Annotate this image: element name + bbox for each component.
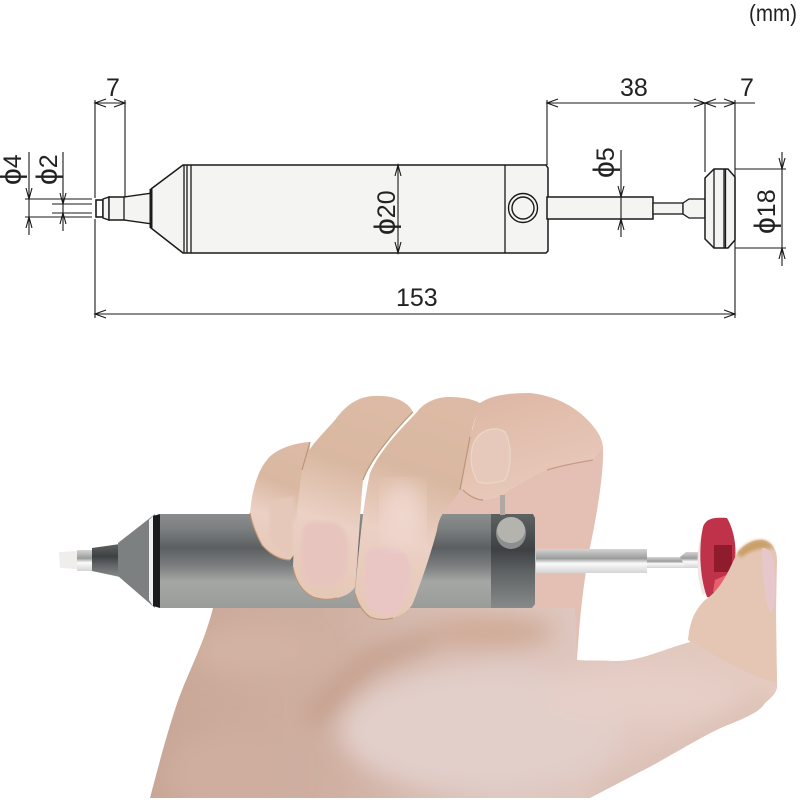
technical drawing xyxy=(25,99,786,318)
tool: white tip xyxy=(59,551,77,569)
nail of finger A xyxy=(269,497,294,555)
tool body outline xyxy=(96,165,548,253)
hand: web behind the tool xyxy=(440,430,603,660)
dimension labels: ϕ2 xyxy=(31,154,64,185)
dimension labels: 7 xyxy=(106,74,120,102)
dimension lines xyxy=(25,100,786,318)
finger A xyxy=(250,442,310,560)
thumb tip over knob xyxy=(688,540,777,683)
finger creases xyxy=(250,412,593,619)
tool: end section xyxy=(491,514,535,608)
tool: red knob xyxy=(697,518,736,597)
stem behind finger D xyxy=(500,495,505,515)
nail of finger B xyxy=(301,522,348,587)
dimension labels: 38 xyxy=(620,74,648,102)
finger B xyxy=(293,396,413,599)
thumb tip edge xyxy=(737,540,773,558)
thumbnail xyxy=(762,548,775,612)
dimension labels: ϕ18 xyxy=(749,189,782,234)
arrowheads xyxy=(26,99,785,318)
tool: round pin xyxy=(496,517,526,549)
plunger rod and knob xyxy=(547,169,735,248)
finger highlight xyxy=(383,483,423,547)
photo: hand holding the tool xyxy=(59,393,777,800)
dimension labels: 7 xyxy=(740,74,754,102)
finger C xyxy=(355,397,480,619)
tool: cylinder body xyxy=(160,514,491,608)
tool: white and black rings xyxy=(149,516,153,606)
rear finger D xyxy=(459,393,603,500)
dimension labels xyxy=(0,74,782,312)
nail of finger C xyxy=(364,547,410,615)
dimension labels: 153 xyxy=(396,284,438,312)
tool: plunger rod xyxy=(536,549,647,573)
palm shading xyxy=(170,616,770,800)
dimension labels: ϕ20 xyxy=(369,190,402,235)
nail of finger D xyxy=(471,429,510,483)
dimension labels: ϕ5 xyxy=(588,147,621,178)
tool: nozzle xyxy=(77,550,92,571)
adjustment pin circle xyxy=(508,194,538,222)
hand: palm and thumb base xyxy=(150,600,777,798)
